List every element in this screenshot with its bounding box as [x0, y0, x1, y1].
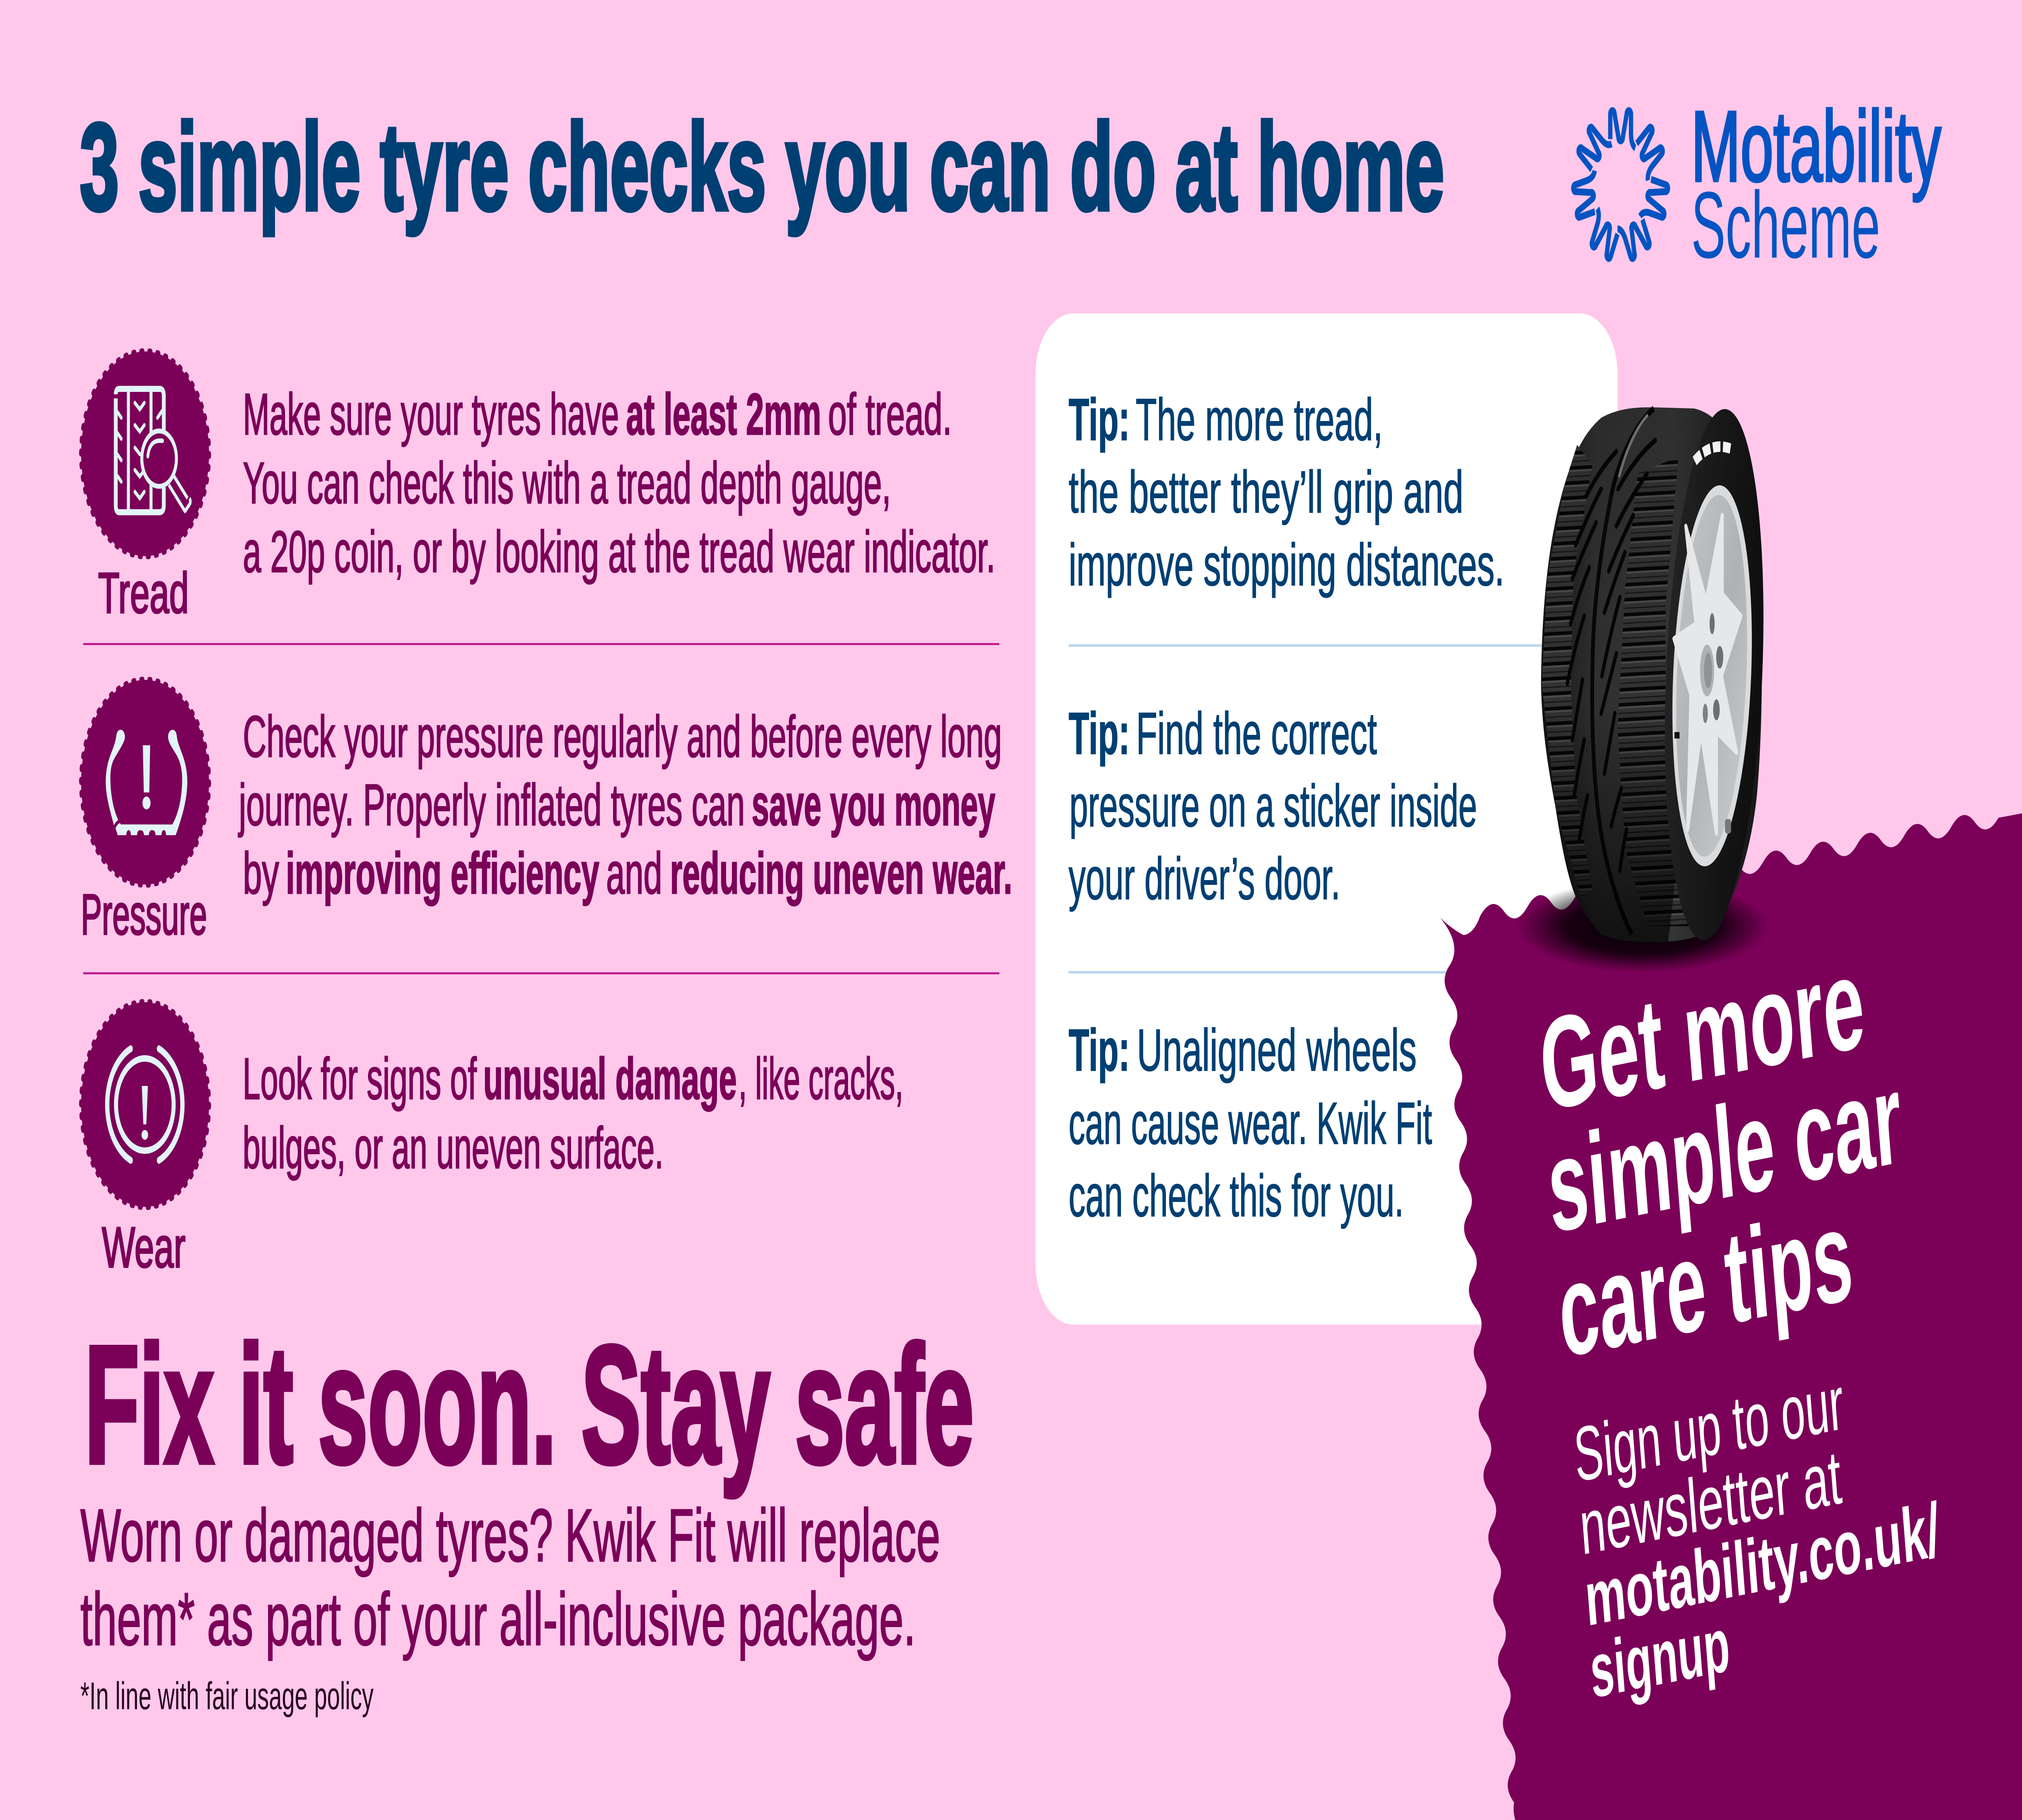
- tip: alignment: Tip:: [1068, 1017, 1130, 1083]
- heading: Get more simple car care tips: Get more: [1535, 929, 1869, 1139]
- text: newsletter sign up: motability.co.uk/: [1582, 1486, 1942, 1642]
- tip: tread: the better they’ll grip and: [1068, 459, 1464, 525]
- text: pressure description: journey. Properly inflated tyres can: [238, 772, 745, 838]
- check: tread: [81, 351, 995, 625]
- text: wear description: Look for signs of: [243, 1046, 477, 1111]
- text: wear description: bulges, or an uneven surface.: [243, 1115, 664, 1181]
- text: newsletter sign up: Sign up to our: [1571, 1359, 1846, 1498]
- sidewall: [1655, 404, 1774, 946]
- tip: tread: improve stopping distances.: [1068, 531, 1504, 598]
- panel: newsletter wavy block: [1440, 813, 2022, 1820]
- text: newsletter sign up: newsletter at: [1577, 1434, 1844, 1571]
- tip: alignment: Unaligned wheels: [1137, 1017, 1417, 1083]
- text: pressure description: Check your pressure regularly and before every long: [243, 704, 1002, 769]
- text: pressure description: reducing uneven wear.: [670, 840, 1012, 906]
- tread sipes: [1542, 445, 1688, 926]
- tyre shadow: [1516, 880, 1769, 973]
- text: tread description: at least 2mm: [626, 381, 821, 447]
- text: tread description: a 20p coin, or by looking at the tread wear indicator.: [243, 519, 995, 584]
- text: tread description: [243, 381, 995, 584]
- text: replacement note: Worn or damaged tyres? Kwik Fit will replace: [80, 1493, 940, 1577]
- check: wear: [81, 1002, 903, 1280]
- image: tyre: [1541, 404, 1774, 946]
- tip: tread: Tip:: [1068, 386, 1130, 453]
- tyre tread body: [1541, 407, 1762, 942]
- label: Wear: Wear: [102, 1216, 186, 1280]
- badge: tread icon: [81, 351, 209, 557]
- text: newsletter sign up: signup: [1587, 1601, 1732, 1714]
- tip: pressure: [1068, 700, 1477, 912]
- heading: Get more simple car care tips: simple car: [1542, 1045, 1907, 1261]
- text: wear description: unusual damage: [483, 1046, 737, 1111]
- logo: Motability Scheme: [1572, 91, 1941, 278]
- logo wordmark: Scheme: Scheme: [1691, 172, 1880, 278]
- text: replacement note: [80, 1493, 940, 1661]
- logo mark: [1572, 111, 1669, 262]
- text: pressure description: improving efficiency: [286, 840, 599, 906]
- weight tag: [1675, 732, 1679, 739]
- central groove: [1592, 408, 1654, 934]
- text: newsletter sign up: [1571, 1359, 1942, 1714]
- text: tread description: You can check this with a tread depth gauge,: [243, 450, 891, 516]
- badge: pressure icon: [81, 679, 209, 885]
- wheel rim: [1665, 481, 1759, 871]
- tread shading: [1541, 407, 1728, 942]
- footnote: *In line with fair usage policy: [80, 1674, 374, 1717]
- text: pressure description: save you money: [752, 772, 995, 838]
- heading: Get more simple car care tips: care tips: [1553, 1181, 1857, 1386]
- text: wear description: , like cracks,: [738, 1046, 903, 1111]
- tip: pressure: your driver’s door.: [1068, 845, 1340, 912]
- tip: tread: The more tread,: [1136, 386, 1383, 453]
- tip: pressure: Tip:: [1068, 700, 1130, 766]
- diagonal grooves: [1567, 440, 1655, 870]
- tip: alignment: can check this for you.: [1068, 1162, 1404, 1229]
- heading: Get more simple car care tips: [1535, 929, 1907, 1386]
- text: tread description: Make sure your tyres have: [243, 381, 619, 447]
- text: pressure description: by: [243, 840, 279, 906]
- text: pressure description: and: [606, 840, 662, 906]
- tip: alignment: [1068, 1017, 1432, 1229]
- badge: wear icon: [81, 1002, 209, 1207]
- panel: tips: [1036, 313, 1618, 1325]
- tip: pressure: pressure on a sticker inside: [1069, 772, 1477, 839]
- label: Pressure: Pressure: [81, 883, 207, 947]
- text: replacement note: them* as part of your all-inclusive package.: [80, 1577, 916, 1661]
- valve: [1725, 819, 1731, 834]
- tip: pressure: Find the correct: [1136, 700, 1377, 766]
- tip: alignment: can cause wear. Kwik Fit: [1068, 1090, 1432, 1156]
- wheel spokes: [1674, 515, 1741, 833]
- text: tread description: of tread.: [828, 381, 952, 447]
- text: wear description: [243, 1046, 903, 1181]
- wheel hub: [1700, 645, 1714, 696]
- logo wordmark: Motability: Motability: [1691, 91, 1941, 202]
- label: Tread: Tread: [98, 561, 189, 625]
- tip: tread: [1068, 386, 1504, 598]
- heading: Fix it soon. Stay safe: Fix it soon. Stay safe: [85, 1311, 974, 1499]
- text: pressure description: [238, 704, 1012, 906]
- check: pressure: [81, 679, 1012, 947]
- title: 3 simple tyre checks you can do at home: [80, 98, 1444, 236]
